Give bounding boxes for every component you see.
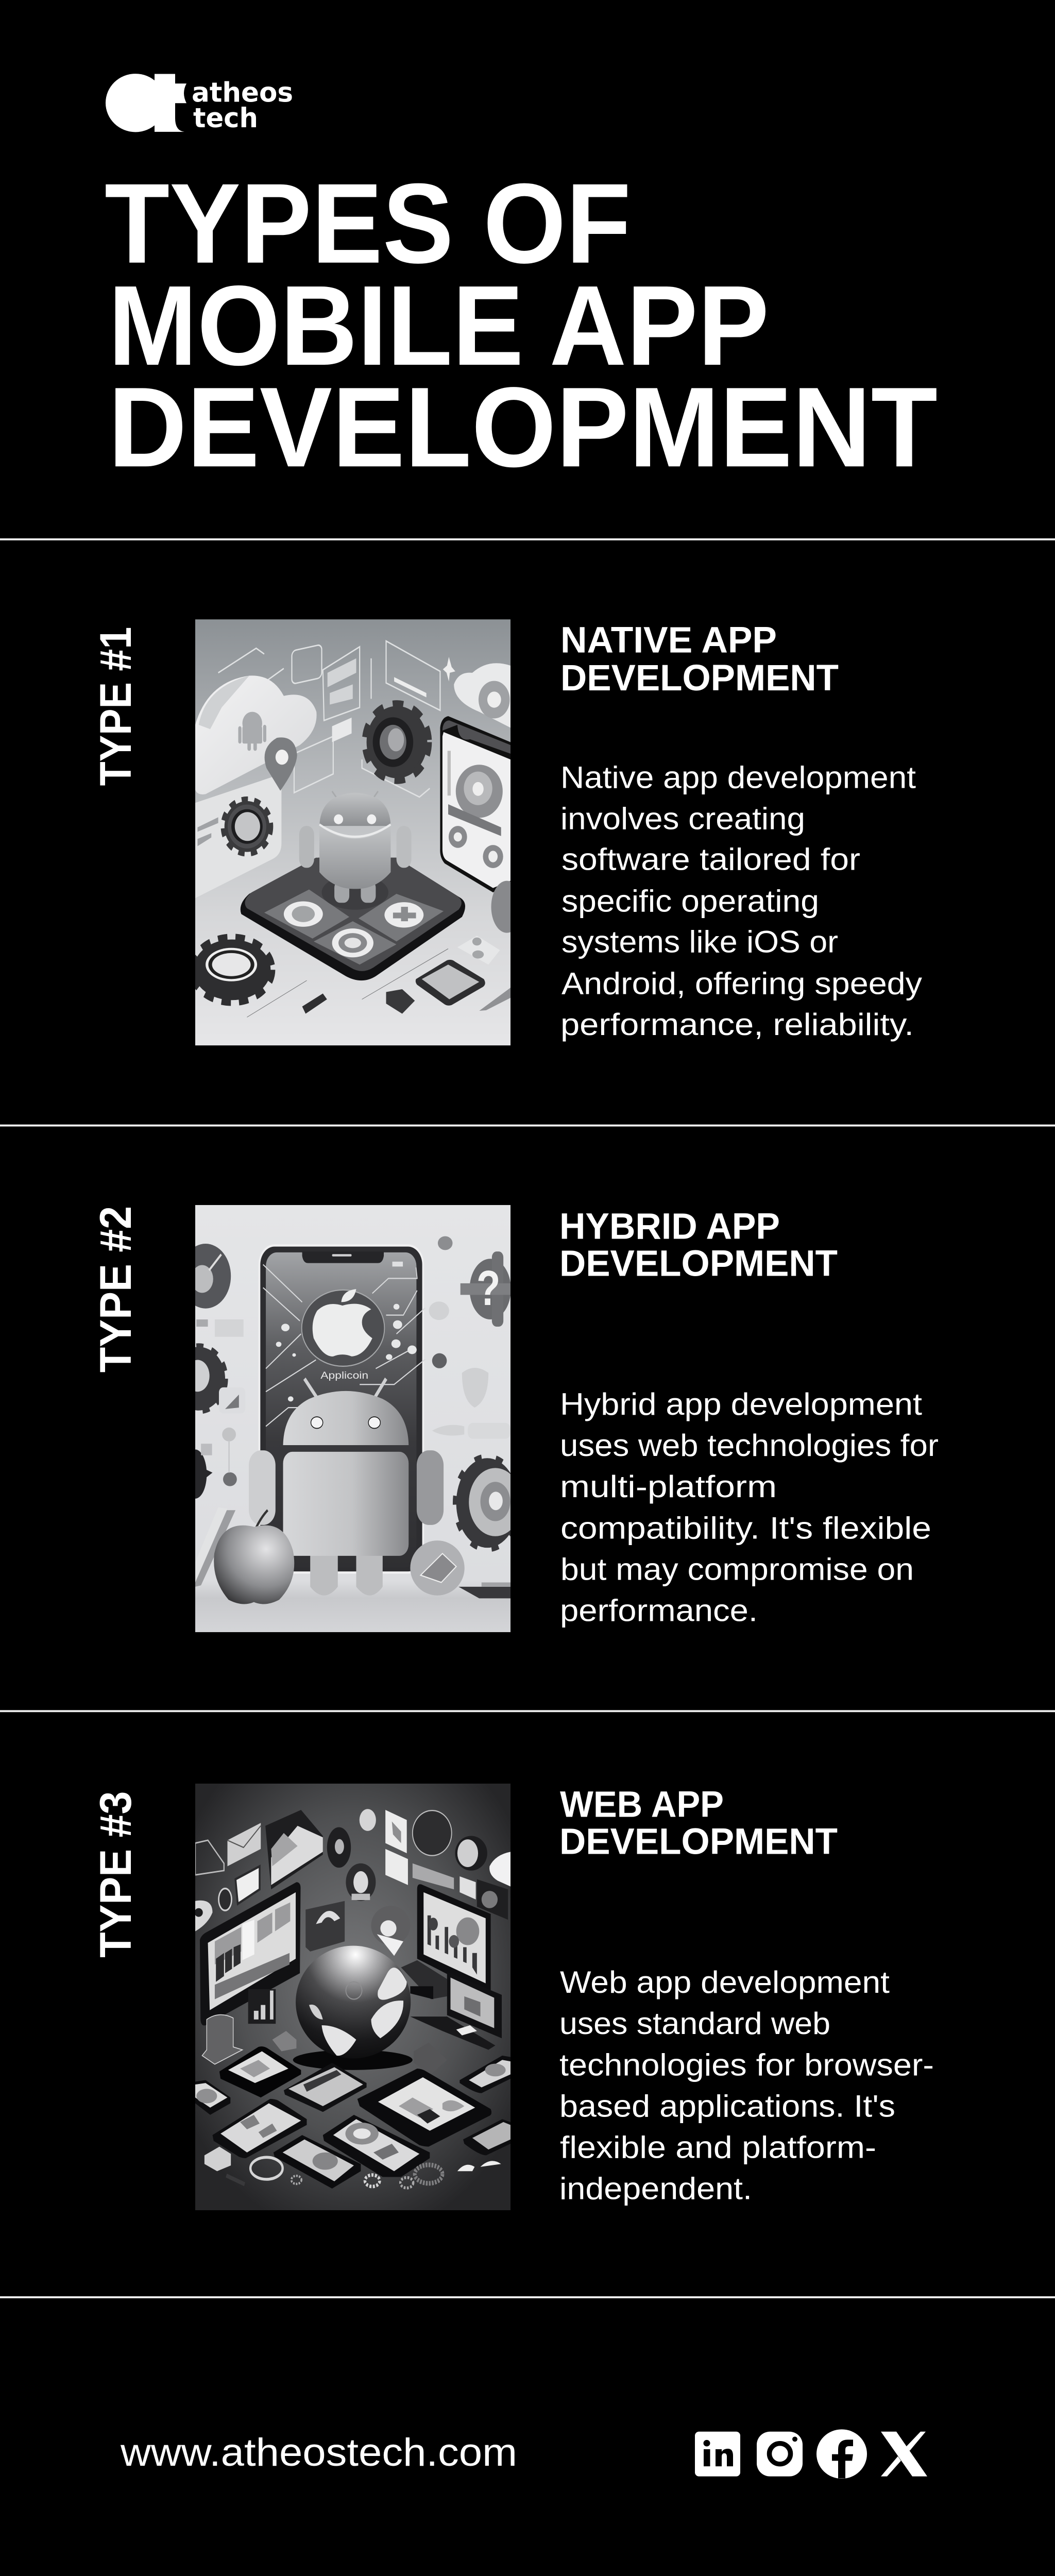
heading bbox=[559, 1206, 838, 1284]
logo: atheos tech bbox=[106, 74, 293, 134]
tablet bbox=[241, 858, 465, 980]
monitor bbox=[200, 1882, 301, 2025]
icon: x bbox=[881, 2432, 927, 2477]
cup and stack bbox=[202, 2015, 243, 2064]
cloud left bbox=[195, 675, 317, 794]
description: software tailored for bbox=[561, 842, 860, 876]
description: Hybrid app development bbox=[560, 1387, 922, 1421]
gear top bbox=[367, 706, 427, 778]
phone bbox=[259, 1244, 424, 1574]
foreground tablets bbox=[219, 2046, 301, 2097]
description: technologies for browser- bbox=[559, 2047, 934, 2082]
sphere bbox=[410, 1540, 465, 1596]
description: performance, reliability. bbox=[560, 1007, 914, 1042]
globe sphere bbox=[296, 1946, 411, 2058]
app label: Applicoin bbox=[320, 1369, 368, 1381]
description: Web app development bbox=[560, 1965, 890, 1999]
description bbox=[560, 760, 922, 1042]
description: but may compromise on bbox=[560, 1552, 914, 1586]
illustration: phone with apple logo and android: ? bbox=[477, 1261, 500, 1316]
icon: linkedin bbox=[695, 2432, 740, 2477]
illustration: phone with apple logo and android bbox=[195, 1205, 511, 1632]
title bbox=[105, 160, 938, 491]
top icons bbox=[227, 1823, 261, 1866]
apple fruit bbox=[254, 1510, 268, 1533]
heading bbox=[559, 1784, 838, 1862]
icon: facebook bbox=[816, 2429, 867, 2479]
panel: type 3 web app bbox=[91, 1784, 934, 2210]
pen bbox=[195, 1510, 235, 1587]
heading: DEVELOPMENT bbox=[560, 658, 839, 699]
description: uses standard web bbox=[559, 2006, 830, 2041]
panel: type 2 hybrid app bbox=[91, 1205, 939, 1632]
panel: type 1 native app bbox=[91, 619, 922, 1045]
heading: WEB APP bbox=[560, 1784, 724, 1825]
icon: instagram bbox=[757, 2432, 803, 2477]
cloud top right bbox=[454, 663, 511, 727]
description: compatibility. It's flexible bbox=[560, 1511, 931, 1545]
globe shadow bbox=[293, 2050, 413, 2070]
heading: HYBRID APP bbox=[559, 1206, 780, 1247]
description: specific operating bbox=[561, 884, 819, 918]
label: type #1: TYPE #1 bbox=[91, 627, 141, 786]
description bbox=[559, 1965, 934, 2206]
label: type #2: TYPE #2 bbox=[91, 1206, 141, 1372]
description: Android, offering speedy bbox=[561, 966, 922, 1001]
gear bottom left bbox=[193, 939, 270, 1000]
pin bbox=[265, 737, 297, 791]
android robot bbox=[299, 791, 412, 910]
laptop bbox=[417, 1884, 491, 1996]
right icons bbox=[438, 1236, 453, 1250]
footer website url: www.atheostech.com bbox=[120, 2431, 517, 2475]
left icons bbox=[180, 1244, 231, 1309]
phone right bbox=[440, 716, 511, 892]
title: MOBILE APP bbox=[108, 262, 769, 389]
description: multi-platform bbox=[560, 1469, 777, 1504]
info panel left bbox=[195, 774, 281, 898]
description: based applications. It's bbox=[559, 2089, 895, 2123]
android robot bbox=[304, 1379, 386, 1400]
title: TYPES OF bbox=[105, 160, 631, 287]
heading bbox=[560, 620, 839, 699]
illustration: globe surrounded by devices bbox=[195, 1784, 511, 2210]
logo: atheos tech: atheos bbox=[192, 76, 293, 108]
description: independent. bbox=[559, 2171, 752, 2206]
center widgets bbox=[305, 1901, 345, 1952]
logo: atheos tech: tech bbox=[193, 102, 258, 134]
heading: DEVELOPMENT bbox=[559, 1243, 838, 1284]
title: DEVELOPMENT bbox=[108, 364, 938, 491]
heading: NATIVE APP bbox=[560, 620, 777, 660]
illustration: android on tablet with gears bbox=[195, 619, 511, 1046]
label: type #3: TYPE #3 bbox=[91, 1791, 141, 1958]
small devices bbox=[302, 993, 327, 1014]
description: involves creating bbox=[560, 801, 805, 836]
description: performance. bbox=[560, 1593, 758, 1628]
description bbox=[560, 1387, 939, 1628]
social icons bbox=[695, 2429, 927, 2479]
description: Native app development bbox=[560, 760, 916, 794]
description: uses web technologies for bbox=[560, 1428, 939, 1463]
description: flexible and platform- bbox=[560, 2130, 876, 2164]
description: systems like iOS or bbox=[561, 924, 838, 959]
heading: DEVELOPMENT bbox=[559, 1821, 838, 1862]
apple logo bbox=[313, 1304, 372, 1357]
